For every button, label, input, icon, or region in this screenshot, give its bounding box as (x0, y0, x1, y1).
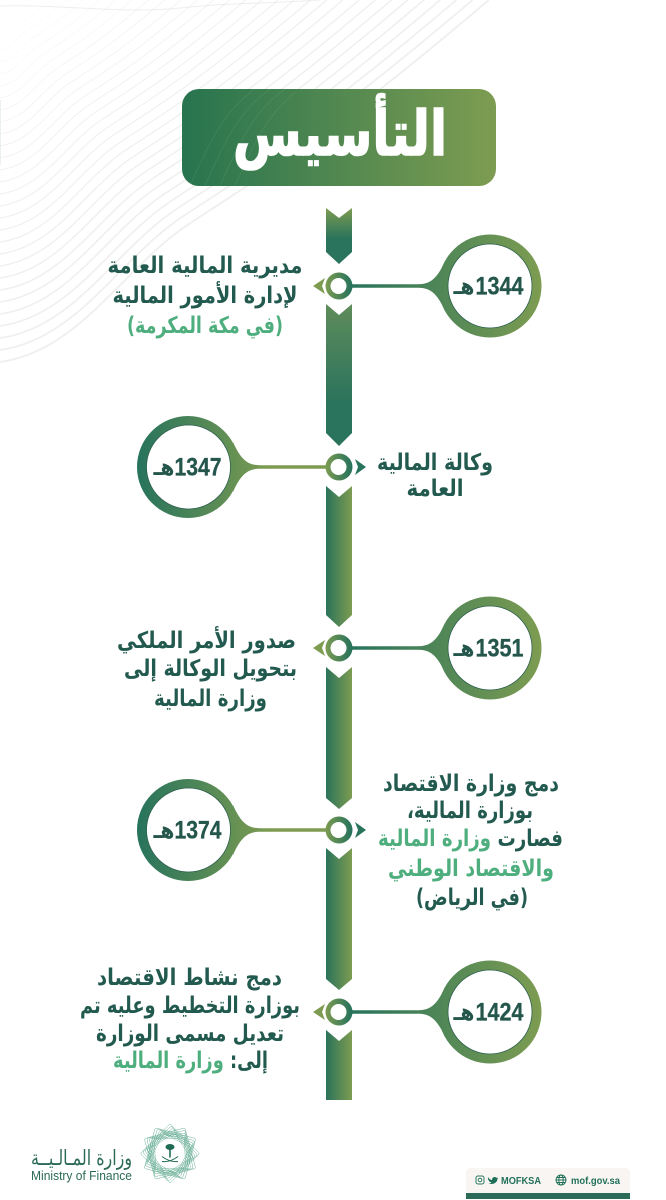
background wave lines (0, 0, 489, 362)
icon: globe (556, 1175, 566, 1185)
logo english name: Ministry of Finance (31, 1168, 132, 1183)
description 1344: لإدارة الأمور المالية (112, 280, 298, 309)
event 1351 (117, 596, 542, 712)
timeline node 1344 (313, 272, 352, 300)
description 1344 (108, 253, 302, 339)
logo arabic name: وزارة المـالـيــة (31, 1146, 132, 1170)
description 1374: دمج وزارة الاقتصاد (383, 771, 559, 797)
year badge 1424: هـ (453, 1000, 474, 1026)
description 1374 (378, 771, 563, 911)
icon: instagram (476, 1176, 484, 1184)
logo emblem (140, 1124, 200, 1183)
description 1351 (117, 625, 297, 712)
description 1344: مديرية المالية العامة (108, 253, 302, 279)
year badge 1351: 1351 (476, 634, 524, 662)
year badge 1351 (350, 596, 542, 700)
year badge 1374: 1374 (174, 816, 222, 844)
description 1351: صدور الأمر الملكي (117, 625, 296, 654)
year badge 1374: هـ (153, 818, 174, 844)
ministry logo (31, 1124, 200, 1183)
timeline node 1347 (326, 454, 366, 480)
description 1374: بوزارة المالية، (407, 798, 533, 824)
description 1351: بتحويل الوكالة إلى (124, 656, 297, 682)
event 1374 (137, 771, 563, 911)
description 1424: دمج نشاط الاقتصاد (97, 965, 282, 991)
year badge 1344: 1344 (476, 272, 524, 300)
title text: التأسيس (233, 93, 447, 170)
description 1344: (في مكة المكرمة) (127, 313, 283, 339)
year badge 1374 (137, 779, 328, 881)
title banner (182, 89, 496, 186)
description 1424: تعديل مسمى الوزارة (96, 1021, 284, 1047)
year badge 1344: هـ (453, 274, 474, 300)
description 1374: والاقتصاد الوطني (388, 856, 554, 882)
year badge 1347: هـ (153, 455, 174, 481)
description 1347 (377, 450, 493, 502)
handle: MOFKSA (501, 1175, 541, 1187)
description 1351: وزارة المالية (154, 686, 267, 712)
event 1347 (137, 416, 493, 518)
description 1424 (80, 965, 300, 1074)
description 1347: العامة (406, 476, 464, 502)
description 1424: بوزارة التخطيط وعليه تم (80, 993, 300, 1019)
timeline bar (326, 208, 352, 1100)
icon: twitter (488, 1177, 498, 1184)
description 1347: وكالة المالية (377, 450, 493, 476)
year badge 1424: 1424 (476, 998, 524, 1026)
year badge 1347: 1347 (174, 454, 222, 482)
timeline node 1351 (313, 634, 352, 662)
timeline node 1424 (313, 998, 352, 1026)
footer contact box (466, 1168, 630, 1199)
description 1374: فصارت وزارة المالية (378, 826, 563, 852)
year badge 1424 (350, 960, 542, 1064)
website: mof.gov.sa (571, 1175, 620, 1187)
timeline node 1374 (326, 816, 366, 844)
description 1424: إلى: وزارة المالية (113, 1048, 268, 1074)
year badge 1351: هـ (453, 636, 474, 662)
event 1424 (80, 960, 542, 1074)
event 1344 (108, 234, 542, 339)
year badge 1347 (137, 416, 328, 518)
year badge 1344 (350, 234, 542, 338)
description 1374: (في الرياض) (416, 885, 528, 911)
